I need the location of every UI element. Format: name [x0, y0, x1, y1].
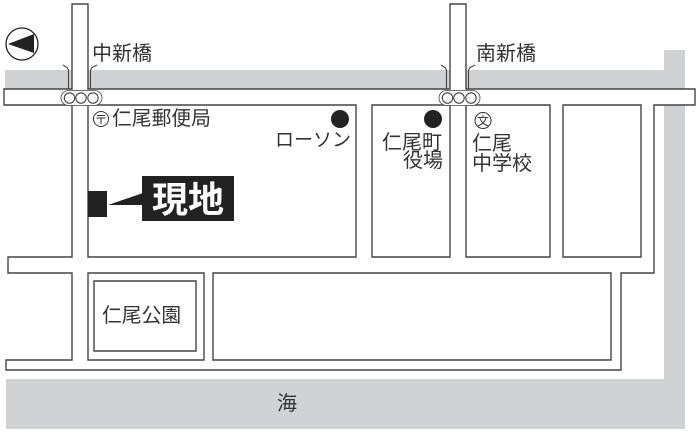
Lawson marker and label: ローソン: [275, 130, 351, 151]
site marker: [88, 191, 107, 217]
town hall marker and label: [382, 110, 443, 172]
bridge label: 南新橋: 南新橋: [476, 42, 536, 65]
bridge label: 中新橋: 中新橋: [92, 42, 152, 65]
bridge: 中新橋: [61, 65, 102, 106]
junior high school marker and label: 中学校: [472, 152, 532, 175]
Lawson marker and label: [275, 110, 351, 151]
site pointer: [108, 193, 143, 205]
junior high school marker and label: [472, 112, 532, 175]
post office label: 仁尾郵便局: [112, 108, 211, 130]
junior high school marker and label: 仁尾: [472, 132, 512, 155]
park label: 仁尾公園: [102, 305, 181, 327]
town hall marker and label: 役場: [403, 149, 443, 172]
town hall marker and label: 仁尾町: [382, 131, 442, 154]
icon: north compass arrow: [6, 28, 38, 60]
junior high school marker and label: 文: [477, 114, 489, 128]
site label: 現地: [152, 179, 224, 220]
bridge: 南新橋: [439, 65, 480, 106]
sea label: 海: [277, 392, 297, 415]
